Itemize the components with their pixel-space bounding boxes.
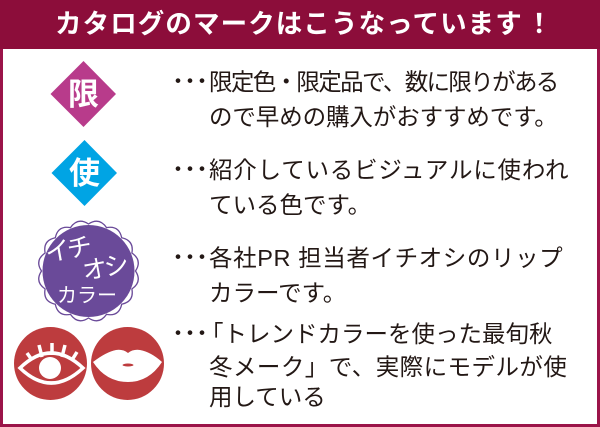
- icon: lips: [91, 327, 164, 400]
- text: use description: ている色です。: [209, 192, 371, 218]
- text: use description: 紹介しているビジュアルに使われ: [209, 157, 569, 183]
- text: limited dots: ・・・: [167, 69, 203, 94]
- text: recommended description: 各社PR 担当者イチオシのリップ: [209, 245, 563, 271]
- text: limited description: [209, 69, 558, 130]
- text: recommended dots: ・・・: [167, 245, 203, 270]
- text: trend dots: ・・・: [167, 321, 203, 346]
- icon: recommended colour badge: [38, 220, 139, 322]
- text: recommended description: [209, 245, 563, 306]
- text: trend description: [200, 321, 567, 410]
- icon: use diamond: 使: [69, 156, 100, 191]
- icon: limited diamond: 限: [68, 77, 99, 112]
- icon: use diamond: [52, 140, 117, 206]
- icon: recommended colour badge: オシ: [80, 251, 129, 286]
- text: trend description: 用している: [209, 384, 326, 410]
- icon: limited diamond: [50, 61, 116, 127]
- text: limited description: 限定色・限定品で、数に限りがある: [209, 69, 558, 95]
- text: trend description: 「トレンドカラーを使った最旬秋: [200, 321, 552, 347]
- title banner: [0, 0, 600, 49]
- text: recommended description: カラーです。: [209, 280, 346, 306]
- title: カタログのマークはこうなっています！: [55, 9, 553, 39]
- text: use dots: ・・・: [167, 157, 203, 182]
- text: use description: [209, 157, 569, 218]
- icon: recommended colour badge: イチ: [43, 233, 92, 268]
- text: trend description: 冬メーク」で、実際にモデルが使: [209, 354, 567, 380]
- text: limited description: ので早めの購入がおすすめです。: [209, 104, 558, 130]
- icon: eye: [14, 327, 87, 400]
- icon: recommended colour badge: カラー: [57, 285, 117, 307]
